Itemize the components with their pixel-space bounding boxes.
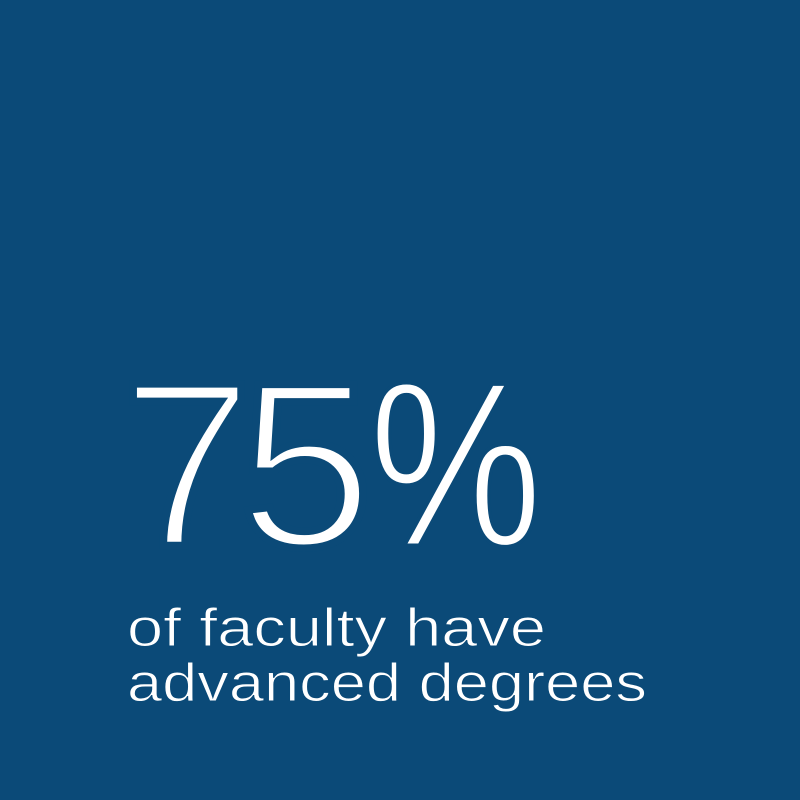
statistic: 75%: % xyxy=(369,333,542,596)
statistic: 75% xyxy=(121,333,542,596)
caption: of faculty have advanced degrees xyxy=(127,598,647,713)
statistic: 75%: 5 xyxy=(238,333,373,596)
caption: of faculty have advanced degrees: of faculty have xyxy=(127,598,546,658)
statistic: 75%: 7 xyxy=(121,334,253,596)
caption: of faculty have advanced degrees: advanced degrees xyxy=(127,653,647,713)
